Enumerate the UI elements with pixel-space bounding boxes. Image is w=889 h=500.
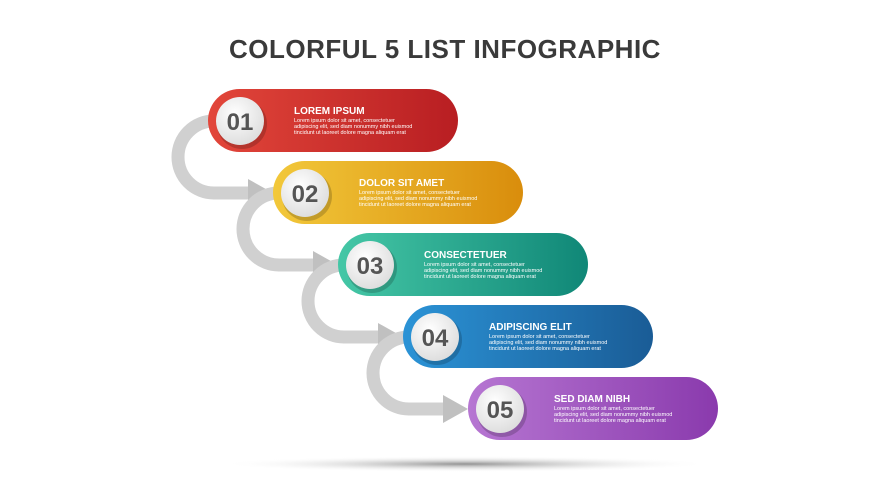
item 1 (208, 89, 458, 152)
item 1: Lorem ipsum dolor sit amet, consectetuer (294, 118, 395, 124)
item 4: Lorem ipsum dolor sit amet, consectetuer (489, 334, 590, 340)
arrow 2 to 3 (243, 193, 338, 279)
arrow 1 to 2 (178, 121, 273, 207)
item 1: LOREM IPSUM (294, 106, 365, 117)
item 4: 04 (422, 325, 449, 352)
item 5 (468, 377, 718, 440)
item 2: Lorem ipsum dolor sit amet, consectetuer (359, 190, 460, 196)
item 3: CONSECTETUER (424, 250, 508, 261)
item 5: adipiscing elit, sed diam nonummy nibh euismod (554, 412, 672, 418)
arrow 4 to 5 (373, 337, 468, 423)
item 2: adipiscing elit, sed diam nonummy nibh euismod (359, 196, 477, 202)
item 2: tincidunt ut laoreet dolore magna aliquam erat (359, 202, 471, 208)
item 3: Lorem ipsum dolor sit amet, consectetuer (424, 262, 525, 268)
item 3 (338, 233, 588, 296)
item 1: 01 (227, 109, 253, 136)
title: COLORFUL 5 LIST INFOGRAPHIC (229, 34, 661, 64)
item 3: adipiscing elit, sed diam nonummy nibh euismod (424, 268, 542, 274)
item 5: tincidunt ut laoreet dolore magna aliquam erat (554, 418, 666, 424)
arrow 3 to 4 (308, 265, 403, 351)
item 2: 02 (292, 181, 318, 208)
item 4 (403, 305, 653, 368)
item 5: 05 (487, 397, 513, 424)
item 1: adipiscing elit, sed diam nonummy nibh euismod (294, 124, 412, 130)
item 3: tincidunt ut laoreet dolore magna aliquam erat (424, 274, 536, 280)
item 4: ADIPISCING ELIT (489, 322, 572, 333)
item 5: Lorem ipsum dolor sit amet, consectetuer (554, 406, 655, 412)
item 4: adipiscing elit, sed diam nonummy nibh euismod (489, 340, 607, 346)
item 5: SED DIAM NIBH (554, 394, 630, 405)
item 2: DOLOR SIT AMET (359, 178, 444, 189)
item 2 (273, 161, 523, 224)
item 3: 03 (357, 253, 383, 280)
item 1: tincidunt ut laoreet dolore magna aliquam erat (294, 130, 406, 136)
item 4: tincidunt ut laoreet dolore magna aliquam erat (489, 346, 601, 352)
floor shadow (220, 456, 710, 472)
